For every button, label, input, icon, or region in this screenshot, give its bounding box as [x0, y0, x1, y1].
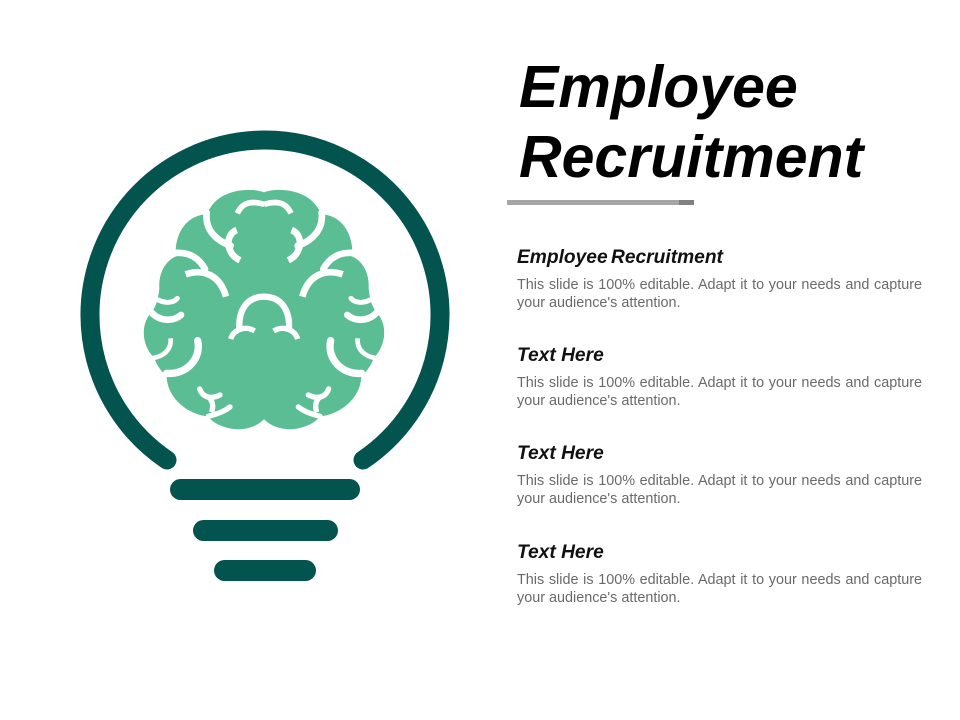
bulb base bars — [170, 479, 360, 581]
text block: text here 3: This slide is 100% editable. Adapt it to your needs and capture — [517, 572, 922, 588]
text block: text here 2: This slide is 100% editable. Adapt it to your needs and capture — [517, 473, 922, 489]
text block: text here 3: Text Here — [517, 542, 604, 563]
text block: text here 2 — [517, 443, 922, 507]
text block: text here 1: Text Here — [517, 345, 604, 366]
title: Recruitment — [519, 124, 863, 190]
text block: employee recruitment — [517, 247, 922, 311]
icon: light bulb with brain — [80, 130, 450, 581]
text block: text here 1: This slide is 100% editable. Adapt it to your needs and capture — [517, 375, 922, 391]
divider rule — [507, 200, 694, 205]
bulb outline arc — [90, 140, 440, 460]
text block: employee recruitment: your audience's attention. — [517, 295, 681, 311]
text block: employee recruitment: This slide is 100% editable. Adapt it to your needs and capture — [517, 277, 922, 293]
text block: text here 2: your audience's attention. — [517, 491, 681, 507]
text block: text here 2: Text Here — [517, 443, 604, 464]
text block: employee recruitment: Employee Recruitment — [517, 247, 723, 268]
title: Employee — [519, 54, 798, 120]
text block: text here 3 — [517, 542, 922, 606]
text block: text here 1 — [517, 345, 922, 409]
text block: text here 1: your audience's attention. — [517, 393, 681, 409]
title — [519, 54, 866, 190]
brain — [144, 190, 384, 429]
text block: text here 3: your audience's attention. — [517, 590, 681, 606]
